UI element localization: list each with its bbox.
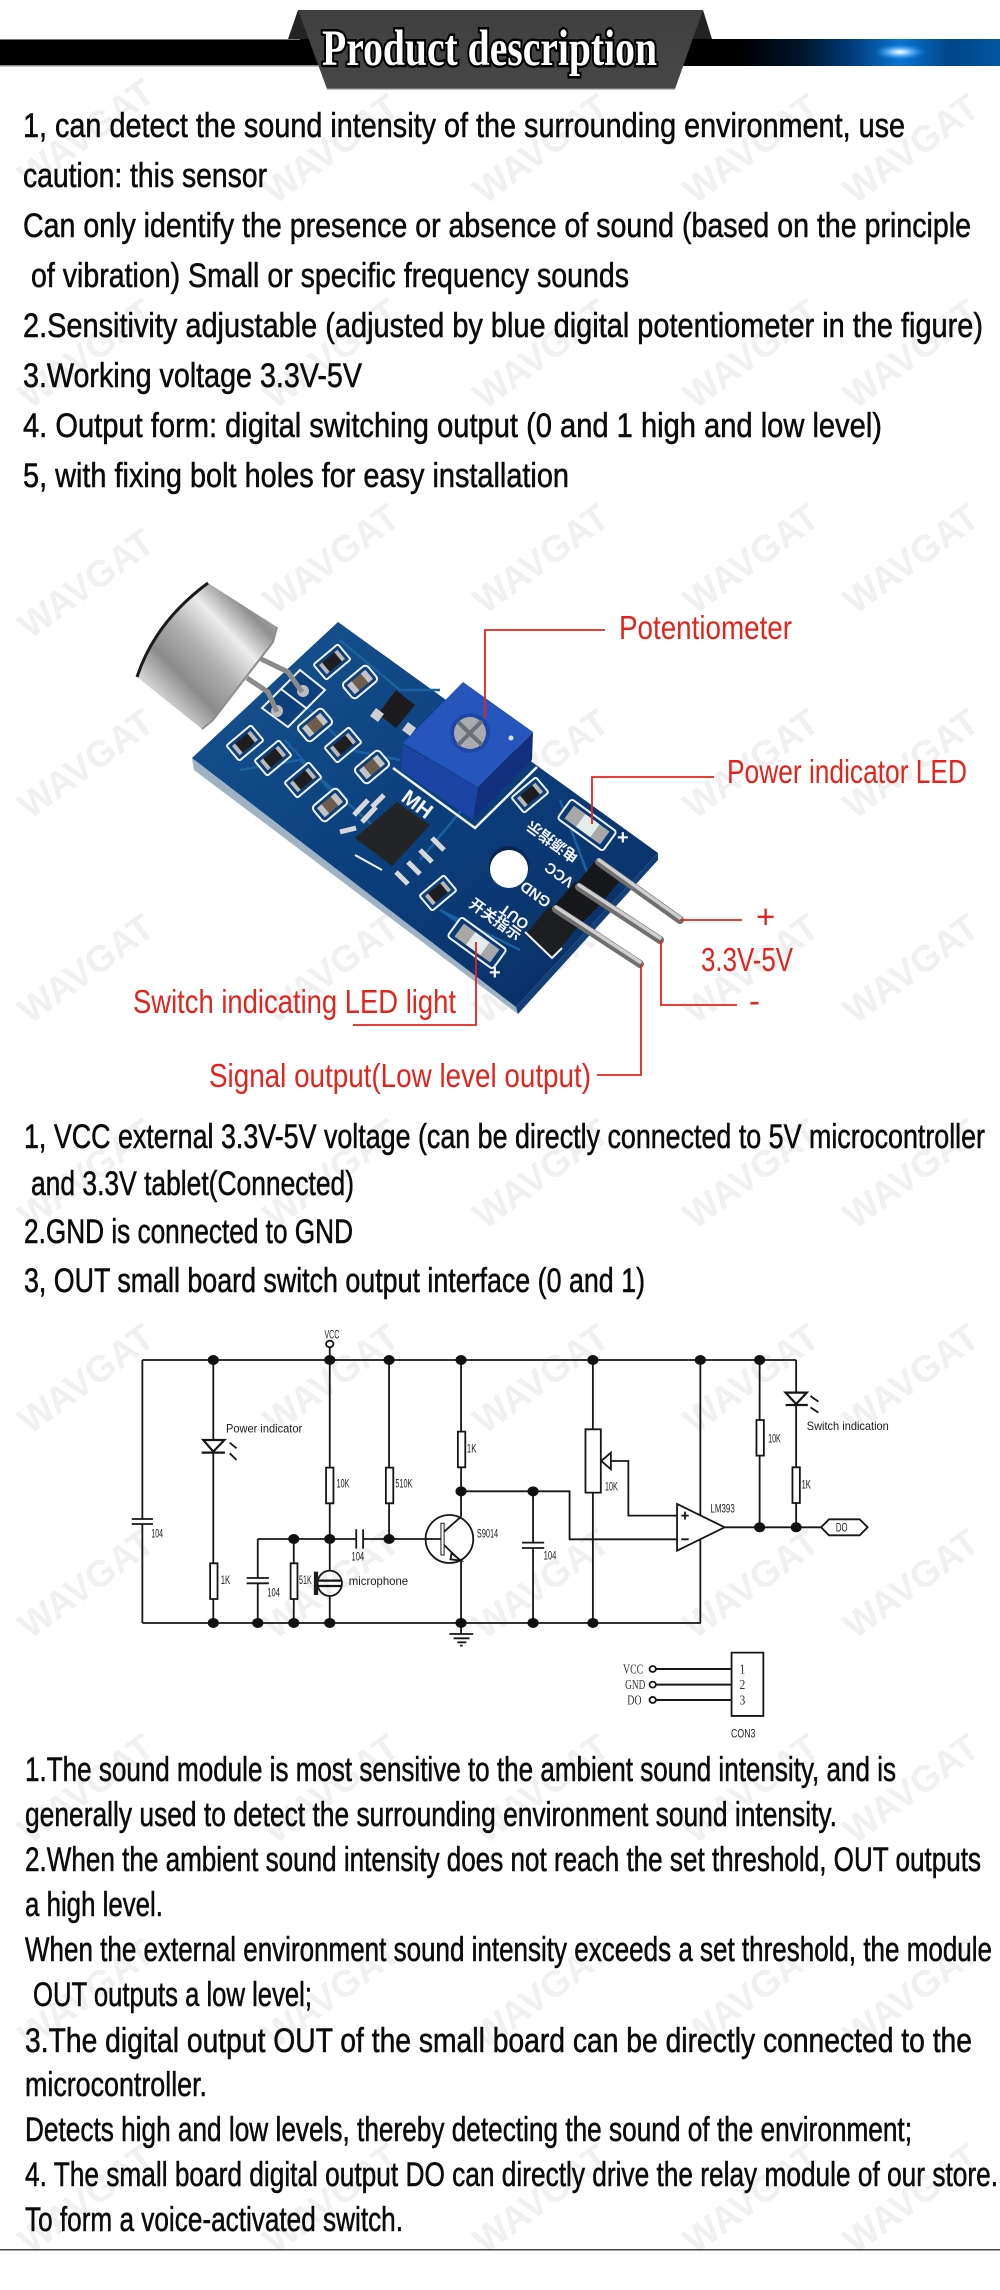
resistors: [210, 1420, 800, 1599]
watermark pattern: WAVGAT: [676, 496, 827, 621]
watermark pattern: WAVGAT: [836, 1521, 987, 1646]
component labels: 104: [151, 1527, 163, 1540]
silkscreen labels: [466, 816, 629, 984]
silkscreen labels: VCC: [542, 858, 577, 891]
callout: voltage minus: [661, 940, 760, 1019]
banner ears: [288, 10, 712, 39]
component labels: 10K: [605, 1480, 618, 1494]
transistor symbol: [426, 1515, 473, 1563]
pin header: [525, 858, 622, 958]
watermark pattern: WAVGAT: [11, 291, 162, 416]
component labels: 10K: [337, 1477, 349, 1491]
module photo: sound sensor board: [137, 583, 680, 1014]
feature list text: 3.Working voltage 3.3V-5V: [23, 357, 362, 395]
IC chip: [340, 795, 444, 884]
watermark pattern: WAVGAT: [466, 1316, 617, 1441]
watermark pattern: WAVGAT: [256, 1726, 407, 1851]
watermark pattern: WAVGAT: [836, 1726, 987, 1851]
component labels: 1K: [221, 1573, 230, 1587]
callout: switch indicating LED: Switch indicating LED light: [133, 983, 456, 1020]
watermark pattern: WAVGAT: [466, 1521, 617, 1646]
header bar: [0, 39, 1000, 66]
glow: [874, 44, 926, 60]
microphone symbol: [314, 1571, 342, 1596]
watermark pattern: WAVGAT: [836, 2136, 987, 2261]
mounting hole: [489, 846, 529, 886]
watermark pattern: WAVGAT: [11, 71, 162, 196]
watermark pattern: WAVGAT: [256, 1111, 407, 1236]
watermark pattern: WAVGAT: [256, 1931, 407, 2056]
watermark pattern: WAVGAT: [676, 1931, 827, 2056]
watermark pattern: WAVGAT: [11, 1111, 162, 1236]
connector CON3: VCC: [623, 1661, 643, 1676]
watermark pattern: WAVGAT: [836, 86, 987, 211]
watermark pattern: WAVGAT: [11, 1316, 162, 1441]
DO output tag: DO: [836, 1521, 848, 1535]
watermark pattern: WAVGAT: [836, 906, 987, 1031]
watermark pattern: WAVGAT: [256, 1316, 407, 1441]
watermark pattern: WAVGAT: [466, 1726, 617, 1851]
watermark pattern: WAVGAT: [256, 906, 407, 1031]
module behaviour text: a high level.: [25, 1886, 163, 1924]
header banner: [0, 10, 1000, 90]
module behaviour text: [25, 1751, 998, 2239]
connector CON3: [623, 1653, 763, 1741]
watermark pattern: WAVGAT: [676, 1521, 827, 1646]
banner plate: [298, 10, 703, 89]
watermark pattern: WAVGAT: [466, 906, 617, 1031]
connector CON3: DO: [627, 1692, 642, 1707]
component labels: 10K: [768, 1432, 781, 1445]
component labels: 1K: [467, 1442, 476, 1456]
pin description text: 2.GND is connected to GND: [24, 1213, 353, 1251]
callout: signal output: [209, 965, 641, 1094]
switch LED symbol: [786, 1393, 808, 1405]
watermark pattern: WAVGAT: [11, 1521, 162, 1646]
module behaviour text: OUT outputs a low level;: [33, 1976, 312, 2014]
component labels: microphone: [349, 1574, 408, 1588]
connector CON3: GND: [625, 1677, 645, 1692]
microphone legs: [247, 657, 302, 712]
silkscreen labels: +: [617, 827, 629, 849]
potentiometer wiper arrow: [601, 1453, 611, 1469]
feature list text: caution: this sensor: [23, 157, 267, 195]
callout: voltage label: 3.3V-5V: [701, 941, 793, 978]
potentiometer outline: [393, 767, 537, 828]
component labels: 510K: [395, 1477, 412, 1491]
component labels: 104: [267, 1586, 280, 1600]
DO output tag: [821, 1519, 868, 1535]
transistor: [370, 690, 416, 736]
silkscreen MH: MH: [397, 786, 437, 824]
module behaviour text: microcontroller.: [25, 2066, 207, 2104]
watermark pattern: WAVGAT: [836, 496, 987, 621]
watermark pattern: WAVGAT: [836, 291, 987, 416]
rails and wires: [132, 1347, 821, 1646]
callout: potentiometer: [485, 609, 792, 718]
component labels: 104: [351, 1550, 364, 1564]
silkscreen labels: 电源指示: [523, 816, 582, 866]
watermark pattern: WAVGAT: [676, 906, 827, 1031]
watermark pattern: WAVGAT: [11, 521, 162, 646]
watermark pattern: WAVGAT: [676, 1316, 827, 1441]
connector CON3: 2: [740, 1677, 745, 1692]
feature list text: of vibration) Small or specific frequency sounds: [31, 257, 629, 295]
watermark pattern: WAVGAT: [466, 86, 617, 211]
watermark pattern: WAVGAT: [11, 2136, 162, 2261]
title: Product description: [322, 21, 657, 77]
watermark pattern: WAVGAT: [676, 1111, 827, 1236]
watermark pattern: WAVGAT: [256, 2136, 407, 2261]
watermark pattern: WAVGAT: [466, 1111, 617, 1236]
watermark pattern: WAVGAT: [836, 1316, 987, 1441]
watermark pattern: WAVGAT: [836, 1111, 987, 1236]
watermark pattern: WAVGAT: [676, 86, 827, 211]
feature list text: 5, with fixing bolt holes for easy installation: [23, 457, 569, 495]
callout: signal output: Signal output(Low level output): [209, 1057, 591, 1094]
connector CON3: 1: [740, 1661, 745, 1676]
pcb traces: [240, 640, 590, 950]
watermark pattern: WAVGAT: [256, 496, 407, 621]
VCC terminal: [326, 1341, 333, 1347]
junction dots: [208, 1355, 802, 1628]
component labels: [151, 1328, 889, 1600]
watermark pattern: WAVGAT: [466, 2136, 617, 2261]
connector CON3: CON3: [731, 1727, 755, 1741]
potentiometer: [401, 682, 533, 820]
power LED: [557, 799, 617, 851]
watermark pattern: WAVGAT: [466, 701, 617, 826]
watermark pattern: WAVGAT: [11, 906, 162, 1031]
component labels: S9014: [477, 1527, 498, 1541]
power LED symbol: [202, 1440, 225, 1453]
component labels: Switch indication: [807, 1419, 889, 1433]
watermark pattern: WAVGAT: [466, 1931, 617, 2056]
callout: voltage plus: +: [756, 898, 775, 935]
connector CON3: 3: [740, 1692, 745, 1707]
component labels: VCC: [324, 1328, 339, 1342]
watermark pattern: WAVGAT: [256, 291, 407, 416]
component labels: 104: [544, 1549, 556, 1562]
watermark pattern: WAVGAT: [11, 701, 162, 826]
silkscreen labels: OUT: [497, 900, 532, 933]
pins: [556, 860, 680, 964]
silkscreen labels: +: [489, 962, 501, 984]
circuit schematic: [132, 1328, 889, 1741]
microphone capsule: [137, 583, 277, 729]
component labels: LM393: [710, 1502, 735, 1516]
component labels: Power indicator: [226, 1422, 303, 1436]
watermark pattern: WAVGAT: [11, 1726, 162, 1851]
watermark pattern: WAVGAT: [466, 291, 617, 416]
pin description text: and 3.3V tablet(Connected): [31, 1165, 354, 1203]
resistors and capacitors: [313, 644, 351, 680]
callout: voltage minus: -: [749, 982, 760, 1019]
mic pad outlines: [262, 670, 325, 727]
silkscreen labels: 开关指示: [466, 895, 525, 945]
callout: potentiometer: Potentiometer: [619, 609, 792, 646]
feature list text: 4. Output form: digital switching output (0 and 1 high and low level): [23, 407, 882, 445]
pin description text: [24, 1118, 985, 1300]
pcb board: [192, 622, 658, 1007]
watermark pattern: WAVGAT: [836, 1931, 987, 2056]
feature list text: [23, 107, 983, 495]
callout: voltage plus: [680, 898, 775, 935]
module behaviour text: To form a voice-activated switch.: [25, 2201, 403, 2239]
watermark pattern: WAVGAT: [11, 1931, 162, 2056]
callout: switch indicating LED: [133, 942, 476, 1025]
component labels: 1K: [801, 1478, 811, 1491]
watermark pattern: WAVGAT: [256, 701, 407, 826]
pcb edge: [192, 758, 518, 1014]
watermark pattern: WAVGAT: [676, 291, 827, 416]
watermark pattern: WAVGAT: [676, 701, 827, 826]
watermark pattern: WAVGAT: [256, 86, 407, 211]
pin description text: 3, OUT small board switch output interface (0 and 1): [24, 1262, 645, 1300]
switch LED: [447, 917, 507, 969]
watermark pattern: WAVGAT: [256, 1521, 407, 1646]
component labels: 51K: [299, 1573, 312, 1587]
watermark pattern: WAVGAT: [836, 701, 987, 826]
callout: power indicator LED: [592, 753, 967, 824]
watermark pattern: WAVGAT: [676, 2136, 827, 2261]
watermark pattern: WAVGAT: [676, 1726, 827, 1851]
watermark pattern: WAVGAT: [466, 496, 617, 621]
comparator LM393: [677, 1504, 725, 1551]
silkscreen labels: GND: [517, 877, 554, 911]
